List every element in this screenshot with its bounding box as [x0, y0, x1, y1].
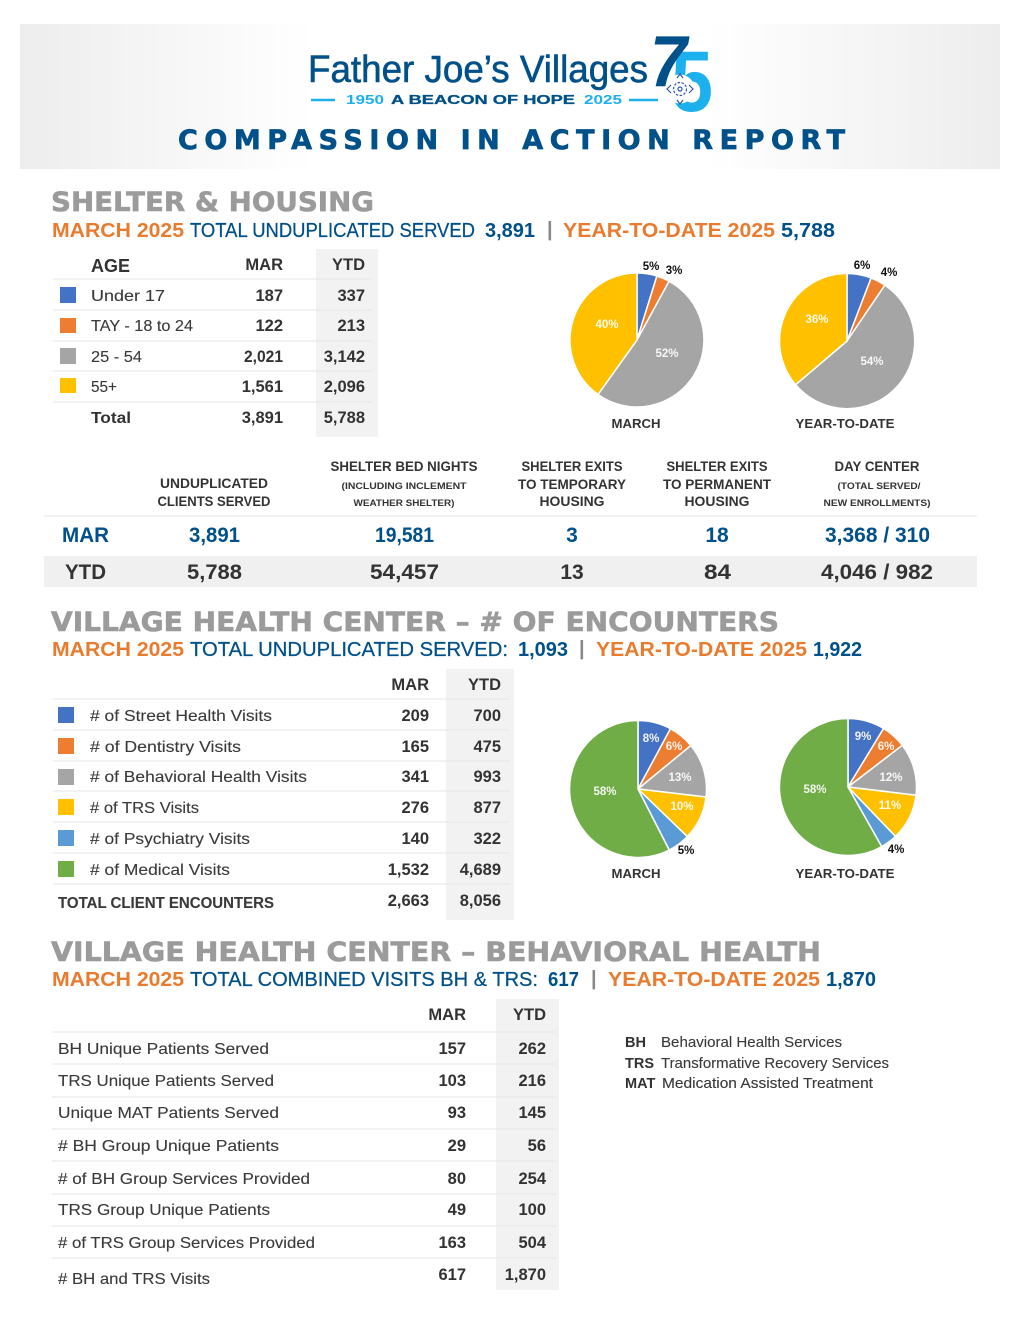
- table: shelter statistics: MAR: [62, 524, 109, 547]
- summary line: behavioral health totals: [52, 968, 876, 991]
- table: age breakdown: 122: [255, 317, 283, 335]
- table: behavioral health: Unique MAT Patients Served: [58, 1105, 279, 1122]
- table: encounters: 8,056: [460, 892, 501, 910]
- table: behavioral health: # of BH Group Services Provided: [58, 1171, 310, 1188]
- pie chart: encounters, year-to-date: 11%: [879, 800, 901, 812]
- table: encounters: 700: [473, 707, 501, 725]
- table: behavioral health: # BH Group Unique Patients: [58, 1138, 279, 1155]
- pie chart: shelter age, year-to-date: 6%: [854, 260, 870, 272]
- table: shelter statistics: WEATHER SHELTER): [354, 498, 454, 509]
- summary line: shelter totals: |: [547, 219, 553, 241]
- table: encounters: 475: [473, 738, 501, 756]
- pie chart: encounters, March: 58%: [593, 786, 617, 798]
- pie chart: encounters, March: 8%: [643, 733, 659, 745]
- table: behavioral health: 262: [518, 1040, 546, 1058]
- table: behavioral health: 1,870: [505, 1266, 546, 1284]
- pie chart: shelter age, year-to-date: 36%: [805, 314, 829, 326]
- table: encounters: 877: [473, 799, 501, 817]
- table: shelter statistics: HOUSING: [684, 494, 750, 509]
- table: behavioral health: 103: [438, 1072, 466, 1090]
- legend: abbreviations: MAT: [625, 1076, 655, 1092]
- legend: abbreviations: BH: [625, 1035, 646, 1051]
- pie chart: shelter age, year-to-date: 54%: [860, 356, 884, 368]
- pie chart: encounters, March: 5%: [678, 845, 694, 857]
- table: behavioral health: 145: [518, 1104, 546, 1122]
- table: shelter statistics: 84: [704, 561, 731, 584]
- pie chart: encounters, March: 6%: [666, 741, 682, 753]
- table: shelter statistics: 54,457: [370, 561, 439, 584]
- pie chart: shelter age, March: 5%: [643, 261, 659, 273]
- logo: Father Joe's Villages 75: 2025: [584, 92, 622, 107]
- table: shelter statistics: NEW ENROLLMENTS): [824, 498, 930, 509]
- table: behavioral health: MAR: [428, 1006, 466, 1024]
- table: shelter statistics: (TOTAL SERVED/: [838, 481, 921, 492]
- table: age breakdown: 5,788: [324, 409, 365, 427]
- table: shelter statistics: [44, 459, 977, 587]
- summary line: health center totals: 1,093: [518, 639, 568, 661]
- table: behavioral health: # BH and TRS Visits: [58, 1271, 210, 1288]
- table: encounters: TOTAL CLIENT ENCOUNTERS: [58, 895, 274, 912]
- pie chart: encounters, year-to-date: 58%: [803, 784, 827, 796]
- table: encounters: 341: [401, 768, 429, 786]
- table: age breakdown: 3,142: [324, 348, 365, 366]
- table: behavioral health: 100: [518, 1201, 546, 1219]
- table: behavioral health: 504: [518, 1234, 547, 1252]
- logo: Father Joe's Villages 75: A BEACON OF HOPE: [391, 92, 575, 107]
- table: age breakdown: TAY - 18 to 24: [91, 318, 193, 335]
- table: behavioral health: # of TRS Group Services Provided: [58, 1235, 315, 1252]
- table: age breakdown: 1,561: [242, 378, 283, 396]
- table: behavioral health: 56: [528, 1137, 546, 1155]
- pie chart: shelter age, year-to-date: YEAR-TO-DATE: [796, 416, 895, 431]
- table: age breakdown: 2,096: [324, 378, 365, 396]
- table: encounters: 322: [473, 830, 501, 848]
- table: age breakdown: YTD: [332, 256, 365, 274]
- pie chart: encounters, year-to-date: 6%: [878, 741, 894, 753]
- table: encounters: [53, 669, 514, 920]
- summary line: behavioral health totals: MARCH 2025: [52, 969, 184, 991]
- summary line: health center totals: MARCH 2025: [52, 639, 184, 661]
- summary line: health center totals: TOTAL UNDUPLICATED SERVED:: [190, 639, 508, 661]
- table: behavioral health: TRS Group Unique Patients: [58, 1202, 270, 1219]
- pie chart: encounters, March: MARCH: [612, 866, 660, 881]
- legend: abbreviations: TRS: [625, 1056, 654, 1072]
- table: behavioral health: 216: [518, 1072, 546, 1090]
- table: encounters: # of TRS Visits: [90, 800, 199, 817]
- table: shelter statistics: 3,891: [189, 524, 240, 547]
- pie chart: shelter age, March: 40%: [595, 319, 619, 331]
- table: shelter statistics: CLIENTS SERVED: [158, 494, 271, 509]
- logo: Father Joe's Villages 75: [308, 22, 713, 130]
- table: age breakdown: Under 17: [91, 288, 165, 305]
- table: shelter statistics: DAY CENTER: [834, 459, 920, 474]
- table: age breakdown: [53, 249, 378, 437]
- table: encounters: # of Dentistry Visits: [90, 739, 241, 756]
- table: shelter statistics: 19,581: [375, 524, 434, 547]
- table: shelter statistics: UNDUPLICATED: [160, 476, 268, 491]
- table: encounters: 276: [401, 799, 429, 817]
- table: shelter statistics: 13: [560, 561, 584, 584]
- table: shelter statistics: SHELTER EXITS: [522, 459, 622, 474]
- summary line: shelter totals: MARCH 2025: [52, 220, 184, 242]
- summary line: behavioral health totals: TOTAL COMBINED VISITS BH & TRS:: [190, 969, 538, 991]
- table: encounters: # of Street Health Visits: [90, 708, 272, 725]
- table: shelter statistics: 18: [705, 524, 729, 547]
- legend: abbreviations: Behavioral Health Services: [661, 1035, 842, 1051]
- legend: abbreviations: Medication Assisted Treatment: [662, 1076, 873, 1092]
- summary line: behavioral health totals: 617: [548, 969, 579, 991]
- table: age breakdown: AGE: [91, 256, 130, 276]
- summary line: behavioral health totals: 1,870: [826, 969, 876, 991]
- table: age breakdown: Total: [91, 410, 131, 427]
- table: encounters: 4,689: [460, 861, 501, 879]
- pie chart: encounters, year-to-date: 12%: [879, 772, 903, 784]
- pie chart: encounters, year-to-date: YEAR-TO-DATE: [796, 866, 895, 881]
- legend: abbreviations: [625, 1035, 889, 1092]
- table: encounters: # of Medical Visits: [90, 862, 230, 879]
- pie chart: encounters, March: [570, 720, 706, 881]
- logo: Father Joe's Villages 75: 1950: [346, 92, 384, 107]
- pie chart: encounters, year-to-date: [779, 718, 916, 881]
- summary line: health center totals: [52, 638, 862, 661]
- summary line: health center totals: 1,922: [813, 639, 862, 661]
- table: encounters: 165: [401, 738, 429, 756]
- table: age breakdown: 25 - 54: [91, 349, 142, 366]
- pie chart: shelter age, March: 52%: [655, 348, 679, 360]
- table: behavioral health: 80: [448, 1170, 466, 1188]
- pie chart: encounters, year-to-date: 9%: [855, 731, 871, 743]
- pie chart: shelter age, year-to-date: [780, 260, 915, 431]
- pie chart: shelter age, March: [570, 261, 704, 431]
- table: behavioral health: [52, 999, 559, 1290]
- table: encounters: # of Psychiatry Visits: [90, 831, 250, 848]
- summary line: shelter totals: 5,788: [781, 220, 835, 242]
- table: behavioral health: YTD: [513, 1006, 546, 1024]
- table: encounters: 1,532: [388, 861, 429, 879]
- table: age breakdown: 3,891: [242, 409, 283, 427]
- table: shelter statistics: 3: [566, 524, 578, 547]
- summary line: behavioral health totals: |: [591, 968, 597, 990]
- table: encounters: YTD: [468, 676, 501, 694]
- table: age breakdown: 2,021: [244, 348, 283, 366]
- logo: Father Joe's Villages 75: Father Joe’s Villages: [308, 49, 648, 91]
- table: shelter statistics: YTD: [65, 561, 106, 584]
- table: encounters: MAR: [391, 676, 429, 694]
- table: shelter statistics: TO TEMPORARY: [518, 477, 626, 492]
- table: shelter statistics: SHELTER EXITS: [666, 459, 768, 474]
- table: behavioral health: 163: [438, 1234, 466, 1252]
- logo: Father Joe's Villages 75: 7: [650, 22, 690, 102]
- summary line: shelter totals: [52, 219, 835, 242]
- table: behavioral health: 254: [518, 1170, 547, 1188]
- table: age breakdown: 55+: [91, 379, 117, 396]
- table: shelter statistics: (INCLUDING INCLEMENT: [342, 481, 467, 492]
- pie chart: shelter age, March: MARCH: [612, 416, 660, 431]
- table: encounters: 140: [401, 830, 429, 848]
- summary line: behavioral health totals: YEAR-TO-DATE 2025: [608, 969, 820, 991]
- table: behavioral health: BH Unique Patients Served: [58, 1041, 269, 1058]
- table: behavioral health: 157: [438, 1040, 466, 1058]
- table: behavioral health: 617: [438, 1266, 466, 1284]
- table: shelter statistics: 3,368 / 310: [825, 524, 930, 547]
- pie chart: encounters, year-to-date: 4%: [888, 844, 904, 856]
- legend: abbreviations: Transformative Recovery Services: [661, 1056, 889, 1072]
- pie chart: encounters, March: 10%: [670, 801, 694, 813]
- table: age breakdown: 213: [337, 317, 365, 335]
- heading: behavioral health: VILLAGE HEALTH CENTER – BEHAVIORAL HEALTH: [51, 937, 821, 968]
- heading: village health center encounters: VILLAGE HEALTH CENTER – # OF ENCOUNTERS: [51, 607, 779, 638]
- table: age breakdown: MAR: [245, 256, 283, 274]
- summary line: health center totals: YEAR-TO-DATE 2025: [596, 639, 807, 661]
- table: shelter statistics: 4,046 / 982: [821, 561, 933, 584]
- table: age breakdown: 187: [255, 287, 283, 305]
- table: behavioral health: 29: [448, 1137, 466, 1155]
- table: behavioral health: 93: [448, 1104, 466, 1122]
- report title: COMPASSION IN ACTION REPORT: [178, 125, 846, 156]
- summary line: shelter totals: 3,891: [485, 220, 535, 242]
- summary line: shelter totals: YEAR-TO-DATE 2025: [563, 220, 775, 242]
- table: encounters: 209: [401, 707, 429, 725]
- table: encounters: 2,663: [388, 892, 429, 910]
- table: shelter statistics: HOUSING: [540, 494, 604, 509]
- table: behavioral health: TRS Unique Patients Served: [58, 1073, 274, 1090]
- table: shelter statistics: 5,788: [187, 561, 242, 584]
- logo: Father Joe's Villages 75: 5: [671, 34, 713, 130]
- table: age breakdown: 337: [337, 287, 365, 305]
- table: shelter statistics: SHELTER BED NIGHTS: [330, 459, 478, 474]
- table: encounters: # of Behavioral Health Visits: [90, 769, 307, 786]
- pie chart: encounters, March: 13%: [668, 772, 692, 784]
- table: encounters: 993: [473, 768, 501, 786]
- table: behavioral health: 49: [448, 1201, 466, 1219]
- header banner: [20, 22, 1000, 169]
- pie chart: shelter age, March: 3%: [666, 265, 682, 277]
- summary line: shelter totals: TOTAL UNDUPLICATED SERVED: [190, 220, 475, 242]
- summary line: health center totals: |: [579, 638, 585, 660]
- table: shelter statistics: TO PERMANENT: [663, 477, 772, 492]
- pie chart: shelter age, year-to-date: 4%: [881, 267, 897, 279]
- heading: shelter and housing: SHELTER & HOUSING: [51, 187, 374, 218]
